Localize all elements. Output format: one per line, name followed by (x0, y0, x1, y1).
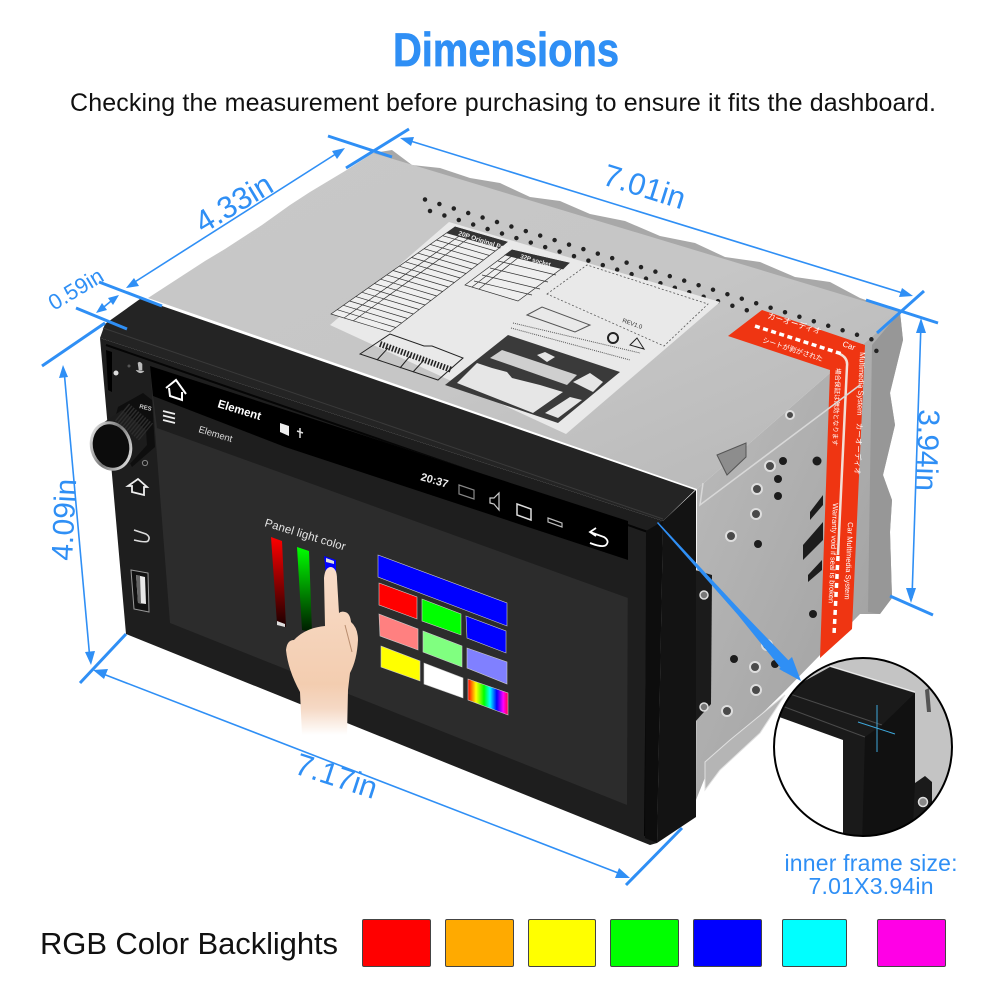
pointer arrow to detail (657, 522, 801, 681)
icon: speaker (490, 493, 499, 510)
side holes and screws (730, 456, 823, 668)
certification text: REV1.0 (621, 318, 643, 331)
colour swatches on screen (378, 555, 508, 715)
tab screws (700, 591, 708, 711)
extension line top right (866, 300, 938, 323)
metal background (806, 659, 951, 802)
hand crease (345, 625, 352, 652)
white cut-out (775, 717, 843, 833)
screw (918, 798, 928, 806)
plate slot (545, 397, 582, 418)
icon: picture (280, 423, 289, 436)
frame top highlight (830, 666, 915, 692)
warning rows (511, 307, 640, 360)
pin table 20P (331, 227, 507, 332)
frame black right band (645, 521, 663, 843)
frame inner groove (106, 345, 648, 836)
blue slider (324, 556, 336, 577)
dashed signature box (547, 265, 708, 346)
side metal slot (925, 688, 931, 712)
side lower bracket (705, 695, 785, 790)
sticker heading: カーオーディオ (766, 310, 822, 336)
icon: battery frame (459, 485, 474, 499)
side clip (717, 443, 746, 475)
sticker warranty: Warranty void if seal is broken (827, 503, 840, 603)
vent holes (425, 200, 880, 352)
microphone hole (128, 364, 130, 368)
icon: hamburger menu (163, 411, 175, 423)
frame highlight (103, 328, 663, 519)
arrowheads (59, 137, 926, 878)
blue slider thumb (326, 558, 334, 564)
extension line top left (328, 136, 392, 157)
clock: 20:37 (419, 471, 450, 491)
label 0.59in: 0.59in (44, 263, 108, 315)
icon: power (142, 460, 148, 466)
extension line left corner (42, 323, 105, 366)
car stereo unit illustration (84, 150, 903, 845)
frame right face (657, 490, 696, 843)
touch screen glass (150, 366, 628, 805)
sticker note: シートが剥がされた (761, 335, 824, 363)
top panel of chassis (148, 153, 900, 489)
icon: usb (297, 428, 303, 438)
icon: recents (548, 518, 562, 527)
specification label (330, 222, 720, 434)
icon: gps pin (114, 370, 118, 376)
extension line top left 2 (346, 129, 409, 168)
rear flange of chassis (373, 150, 900, 330)
icon: return (134, 530, 149, 542)
plate small block (573, 373, 603, 392)
table heading socket: 32P socket (519, 254, 551, 269)
backlight colour swatches (362, 920, 946, 966)
plate square (537, 352, 555, 362)
table heading 20P: 20P Original Port (457, 230, 510, 253)
arrow 0.59 (99, 297, 116, 311)
alignment cross (858, 705, 895, 752)
frame front (100, 338, 663, 845)
sticker tear marks (834, 556, 838, 635)
red warranty sticker (728, 310, 868, 658)
backlight label: RGB Color Backlights (40, 926, 338, 961)
frame corner black (780, 667, 932, 835)
arrow 3.94 (912, 323, 921, 598)
screen top status bar (150, 366, 628, 560)
sticker brand: Car (841, 339, 857, 352)
inner frame size: 7.01X3.94in (808, 873, 934, 899)
side right flange (868, 312, 903, 614)
usb port (131, 570, 149, 612)
icon: close window (517, 504, 531, 520)
pin table socket (465, 250, 569, 301)
frame edge lines (782, 694, 882, 737)
label 4.09in: 4.09in (46, 478, 83, 561)
label 7.17in: 7.17in (291, 746, 382, 806)
icon: home (166, 380, 186, 400)
left bezel controls (84, 350, 155, 612)
arrow 4.33 (130, 150, 342, 285)
knob housing (112, 393, 155, 467)
side screws (722, 411, 794, 716)
extension lines depth (76, 282, 162, 329)
extension line bottom right (626, 828, 682, 885)
label 4.33in: 4.33in (189, 166, 279, 240)
detail magnifier (773, 657, 953, 837)
frame top bevel (100, 299, 695, 521)
sticker dashes (755, 326, 842, 354)
icon: home button (128, 479, 147, 495)
arrow 7.01 (404, 139, 909, 295)
sticker crease (838, 354, 847, 555)
title: Dimensions (393, 23, 619, 76)
hand touching slider (286, 567, 358, 735)
extension line right bottom (890, 596, 933, 615)
side panel of chassis (696, 312, 903, 800)
plate pin strip (490, 350, 577, 385)
screen upper band (153, 396, 628, 598)
extension line top right 2 (877, 291, 924, 333)
app title large: Element (216, 398, 263, 423)
label 3.94in: 3.94in (909, 409, 945, 492)
icon: mic (136, 362, 144, 373)
extension line bottom left (80, 634, 126, 683)
icon: back (590, 528, 608, 546)
label 7.01in: 7.01in (599, 157, 690, 216)
plate openings (457, 363, 563, 413)
arrow 7.17 (98, 672, 626, 876)
panel light label: Panel light color (263, 517, 347, 553)
colour sliders (271, 537, 336, 632)
red slider (271, 537, 286, 627)
dimension lines (42, 129, 938, 885)
app title small: Element (197, 424, 234, 445)
volume knob (84, 410, 147, 476)
arrow 4.09 (64, 370, 90, 660)
subtitle: Checking the measurement before purchasing to ensure it fits the dashboard. (70, 89, 936, 117)
black mounting tab (695, 570, 712, 722)
reset label: RES (139, 404, 152, 413)
certification icons (608, 333, 644, 349)
sticker text strip lower: Car Multimedia System (843, 522, 855, 600)
sticker japanese strip: 場合保証は無効となります (831, 368, 843, 447)
sticker text strip right: Multimedia System カーオーディオ (853, 352, 868, 475)
inner frame note: inner frame size: (784, 850, 958, 876)
red slider thumb (277, 621, 285, 627)
green slider (297, 547, 312, 632)
card slot (106, 350, 112, 392)
wiring plate (445, 335, 620, 423)
connector diagram (360, 334, 463, 380)
side seam (700, 385, 860, 505)
darker inner band (862, 693, 915, 845)
